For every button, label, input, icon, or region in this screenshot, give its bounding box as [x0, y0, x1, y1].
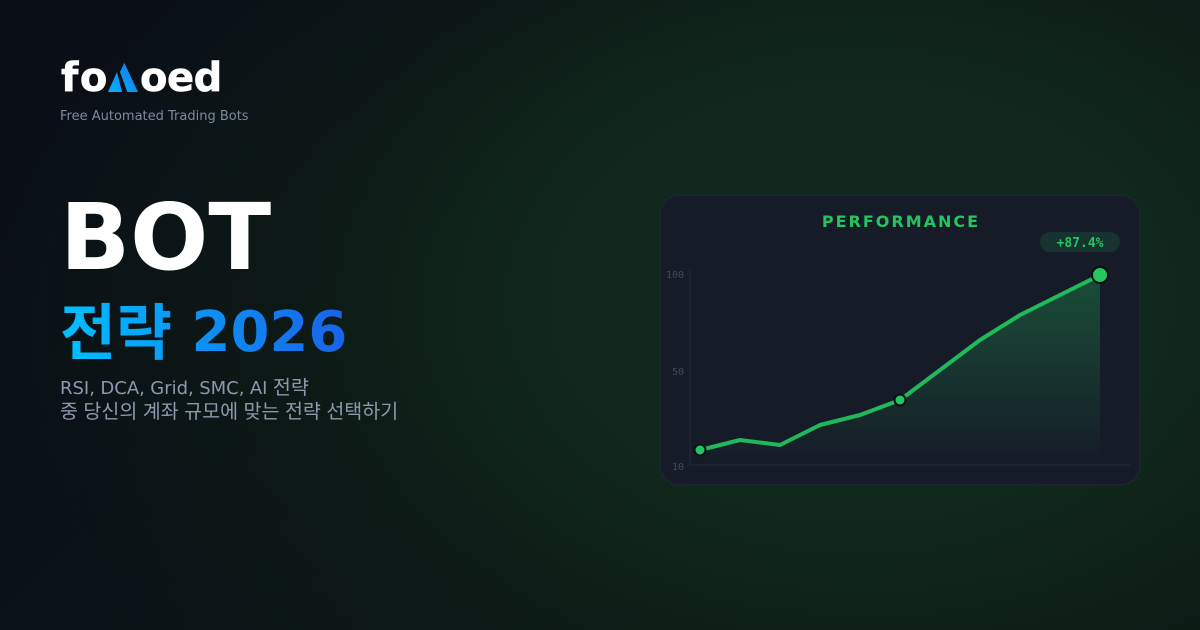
axes [690, 270, 1130, 465]
badge: gain [1040, 232, 1120, 252]
logo icon: twin peaks [108, 62, 138, 92]
data markers [694, 267, 1108, 456]
axis labels: 100 [666, 270, 684, 281]
logo text right: oed [140, 55, 222, 101]
description: RSI, DCA, Grid, SMC, AI 전략 [60, 376, 309, 399]
axis labels [666, 270, 684, 473]
axis labels: 10 [672, 462, 684, 473]
description: 중 당신의 계좌 규모에 맞는 전략 선택하기 [60, 400, 398, 422]
tagline: Free Automated Trading Bots [60, 109, 249, 124]
area under line [700, 275, 1100, 465]
logo [61, 55, 222, 101]
performance line [700, 275, 1100, 450]
badge: gain: +87.4% [1057, 236, 1104, 251]
heading: BOT: BOT [60, 184, 271, 291]
axis labels: 50 [672, 367, 684, 378]
description [60, 376, 398, 422]
panel background [660, 195, 1140, 485]
chart title: PERFORMANCE [822, 212, 980, 231]
logo text left: fo [61, 55, 109, 101]
